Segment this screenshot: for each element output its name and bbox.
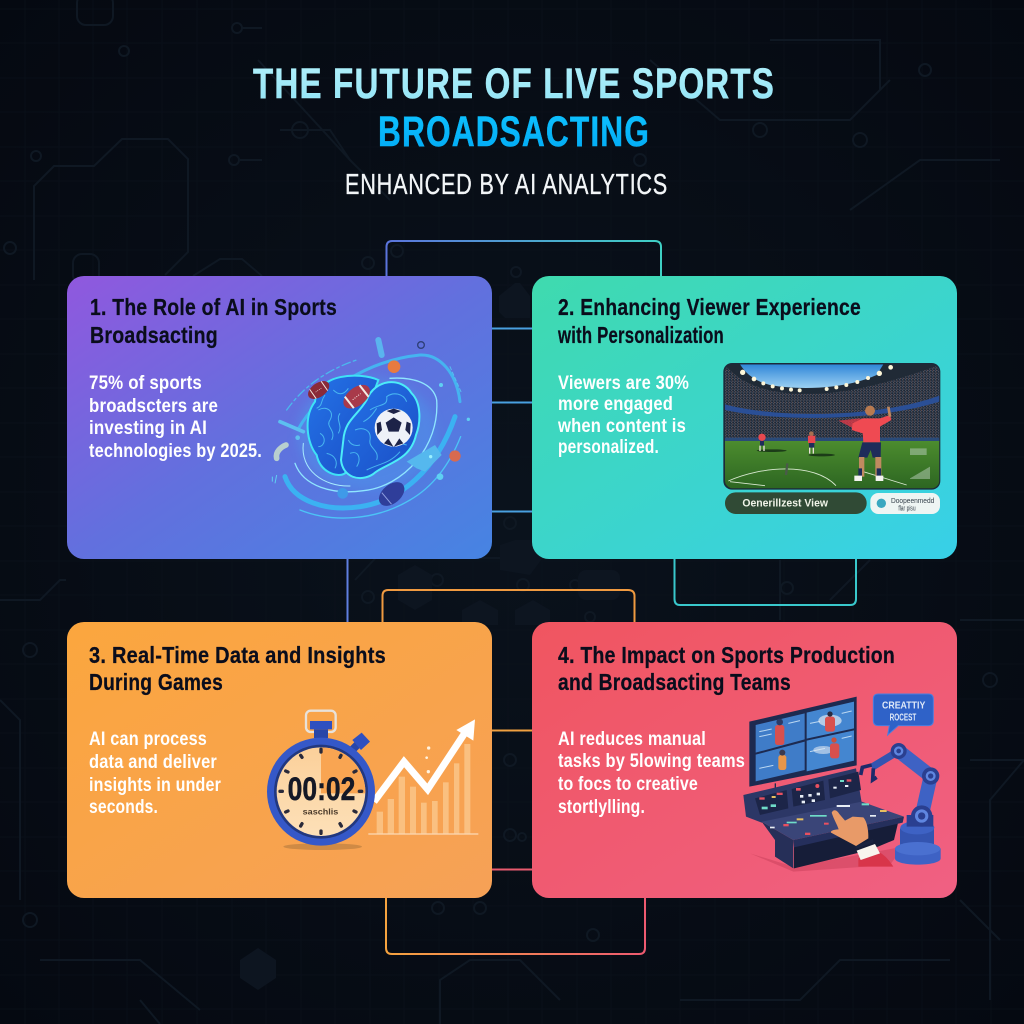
card 3 heading: [89, 642, 386, 695]
card 4 body text: stortlylling.: [558, 796, 645, 818]
card 2 body text: when content is: [557, 415, 686, 437]
icon: soccer ball: [375, 409, 413, 447]
card 1 body text: broadscters are: [89, 395, 218, 417]
subtitle: ENHANCED BY AI ANALYTICS: [345, 169, 668, 201]
stadium view illustration: Oenerillzest View: [742, 498, 828, 510]
robot arm: [861, 743, 941, 865]
card 4 body text: AI reduces manual: [558, 728, 706, 750]
panel 3: real-time data: [67, 622, 492, 898]
card 1 body text: [89, 372, 262, 462]
card 3 background: [67, 622, 492, 898]
card 3 body text: data and deliver: [89, 751, 217, 773]
card 3 body text: seconds.: [89, 796, 158, 818]
card 1 background: [67, 276, 492, 559]
stadium view illustration: Doopeenmedd: [891, 496, 934, 505]
console: [743, 768, 904, 872]
card 4 body text: [558, 728, 745, 818]
card 4 heading: [558, 642, 895, 695]
panel 4: production impact: [532, 622, 957, 898]
card 4 body text: tasks by 5lowing teams: [558, 750, 745, 772]
title line 1: THE FUTURE OF LIVE SPORTS: [253, 60, 775, 108]
speech bubble: ROCEST: [890, 713, 917, 724]
speech bubble: [873, 694, 933, 735]
card 1 heading: [90, 294, 337, 348]
stadium view illustration: [723, 363, 940, 514]
stadium view illustration: flar pisu: [898, 504, 916, 513]
card 1 heading: 1. The Role of AI in Sports: [90, 294, 337, 320]
card 2 body text: Viewers are 30%: [558, 372, 689, 394]
illustration: control room: [743, 694, 941, 872]
card 3 heading: 3. Real-Time Data and Insights: [89, 642, 386, 668]
card 2 body text: personalized.: [558, 436, 659, 458]
card 4 background: [532, 622, 957, 898]
icon: stopwatch: 00:02: [288, 771, 355, 807]
panel 2: viewer personalization: [532, 276, 957, 559]
title line 2: BROADSACTING: [378, 108, 650, 156]
icon: footballs and small balls: [272, 342, 470, 511]
card 1 body text: investing in AI: [89, 417, 207, 439]
card 2 body text: more engaged: [558, 393, 673, 415]
panel 1: role of AI: [67, 276, 492, 559]
card 2 background: [532, 276, 957, 559]
chart: rising bars and arrow: [368, 719, 478, 834]
icon: stopwatch: [267, 711, 375, 850]
card 3 heading: During Games: [89, 669, 223, 695]
card 2 body text: [557, 372, 689, 458]
card 4 body text: to focs to creative: [558, 773, 698, 795]
speech bubble: CREATTIY: [882, 701, 925, 712]
card 1 body text: 75% of sports: [89, 372, 202, 394]
hand on controls: [831, 810, 893, 867]
connectors: [348, 241, 856, 954]
card 3 body text: [89, 728, 221, 818]
card 1 body text: technologies by 2025.: [89, 440, 262, 462]
icon: stopwatch: saschlis: [303, 806, 339, 816]
card 4 heading: 4. The Impact on Sports Production: [558, 642, 895, 668]
icon: AI brain with sports balls: [272, 340, 470, 518]
card 2 heading: [557, 294, 861, 348]
background players: [758, 431, 815, 475]
foreground player: [838, 406, 891, 481]
card 3 body text: insights in under: [89, 774, 221, 796]
monitor wall: [749, 697, 857, 788]
card 2 heading: 2. Enhancing Viewer Experience: [558, 294, 861, 320]
title: [253, 60, 775, 156]
card 3 body text: AI can process: [89, 728, 207, 750]
card 4 heading: and Broadsacting Teams: [558, 669, 791, 695]
card 1 heading: Broadsacting: [90, 322, 218, 348]
card 2 heading: with Personalization: [557, 322, 724, 348]
view labels: [725, 492, 867, 514]
